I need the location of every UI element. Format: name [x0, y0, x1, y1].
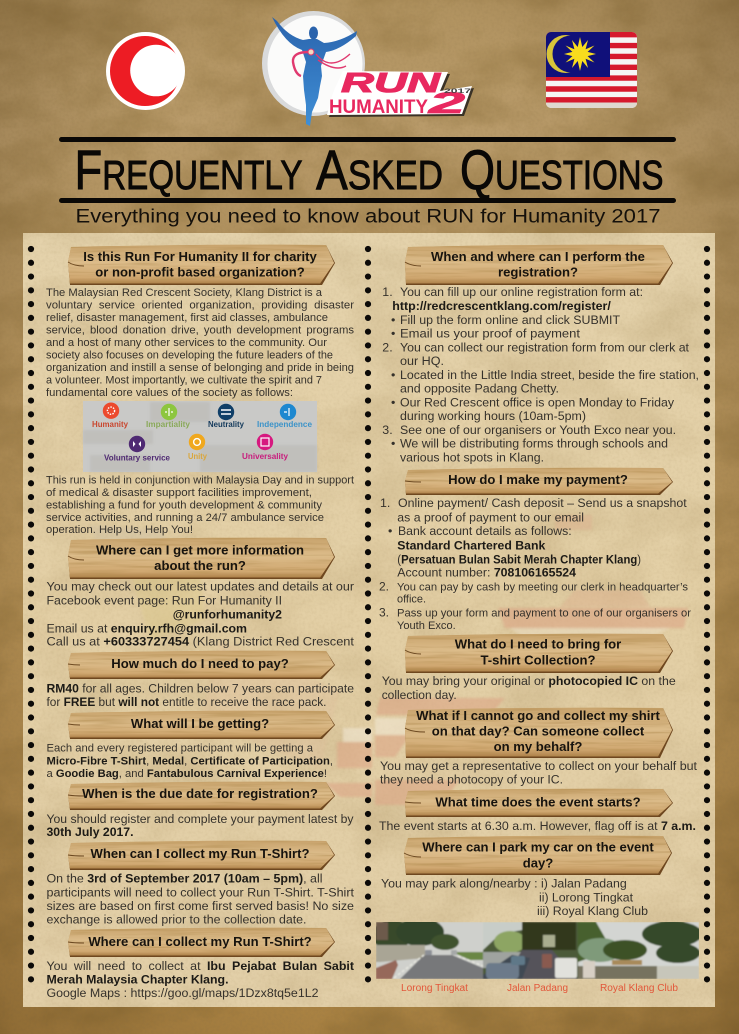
text block: registration steps: •: [391, 396, 395, 410]
panel: right column: [372, 245, 702, 994]
text block: representative: they need a photocopy of your IC.: [380, 773, 563, 787]
text block: payment steps: Bank account details as follows:: [398, 524, 572, 538]
text block: registration steps: Email us your proof of payment: [400, 327, 581, 341]
banner: how much to pay: How much do I need to pay?: [111, 656, 289, 671]
text block: registration steps: You can collect our registration form from our clerk at: [400, 341, 690, 355]
text block: purpose of the run: This run is held in conjunction with Malaysia Day and in support: [46, 474, 354, 486]
text block: race pack: Micro-Fibre T-Shirt, Medal, Certificate of Participation,: [46, 755, 333, 767]
text block: contact details: @runforhumanity2: [173, 607, 282, 621]
content panel: [23, 233, 715, 1007]
text block: contact details: [46, 580, 355, 649]
title: ASKED: [316, 138, 443, 201]
text block: registration steps: Our Red Crescent office is open Monday to Friday: [400, 396, 675, 410]
text block: about the society: and a host of many other services to the community. Our: [46, 337, 327, 349]
text block: about the society: a volunteer. Most importantly, we cultivate the spirit and 7: [46, 374, 322, 386]
banner: collecting on behalf: on my behalf?: [494, 739, 582, 754]
text block: payment steps: 2.: [379, 580, 389, 594]
text block: payment steps: Account number: 708106165524: [397, 566, 576, 580]
text block: contact details: Facebook event page: Run For Humanity II: [46, 593, 282, 607]
text block: registration steps: See one of our organisers or Youth Exco near you.: [400, 423, 676, 437]
text block: parking places: iii) Royal Klang Club: [537, 904, 648, 918]
banner: event time: What time does the event starts?: [435, 795, 641, 810]
banner: how much to pay: [68, 651, 335, 679]
banner: due date: [68, 782, 335, 810]
banner: when to collect T-shirt: When can I collect my Run T-Shirt?: [91, 846, 309, 861]
banner: collecting on behalf: What if I cannot go and collect my shirt: [416, 708, 660, 723]
text block: registration steps: [382, 285, 699, 465]
text block: purpose of the run: operation. Help Us, Help You!: [46, 524, 193, 536]
text block: payment steps: as a proof of payment to our email: [397, 511, 584, 525]
banner: due date: When is the due date for registration?: [82, 786, 318, 801]
text block: collection date: On the 3rd of September 2017 (10am – 5pm), all: [46, 872, 322, 886]
photo captions: Royal Klang Club: [600, 983, 678, 994]
text block: parking places: You may park along/nearby : i) Jalan Padang: [381, 877, 627, 891]
text block: registration steps: various hot spots in Klang.: [400, 451, 544, 465]
logo: Run for Humanity 2: 2: [427, 87, 466, 120]
text block: collection date: sizes are based on first come first served basis! No size: [46, 899, 354, 913]
text block: about the society: fundamental core values of the society as follows:: [46, 387, 293, 399]
logo: Run for Humanity 2: 2017: [444, 88, 472, 95]
text block: payment steps: Online payment/ Cash deposit – Send us a snapshot: [398, 496, 687, 510]
banner: payment: [405, 468, 673, 495]
text block: registration steps: 2.: [382, 341, 393, 355]
text block: purpose of the run: service activities, and running a 24/7 ambulance service: [46, 512, 324, 524]
text block: registration steps: We will be distributing forms through schools and: [400, 437, 668, 451]
banner: more information: [68, 538, 335, 579]
text block: collection place: You will need to collect at Ibu Pejabat Bulan Sabit: [46, 959, 354, 973]
image: seven fundamental values: Impartiality: [146, 419, 190, 429]
text block: payment steps: office.: [397, 594, 426, 606]
text block: about the society: relief, disaster management, first aid classes, ambulance: [46, 312, 328, 324]
text block: parking places: [381, 877, 648, 918]
text block: about the society: organization and instill a sense of belonging and pride in being: [46, 362, 354, 374]
photo captions: [401, 983, 678, 994]
text block: payment steps: Standard Chartered Bank: [397, 538, 545, 552]
text block: payment steps: 3.: [379, 606, 389, 620]
text block: registration steps: •: [391, 437, 395, 451]
text block: race pack: a Goodie Bag, and Fantabulous Carnival Experience !: [46, 768, 327, 780]
banner: what to bring: What do I need to bring for: [455, 636, 621, 651]
banner: more information: Where can I get more information: [96, 542, 304, 558]
text block: representative: You may get a representative to collect on your behalf but: [380, 759, 698, 773]
text block: payment steps: You can pay by cash by meeting our clerk in headquarter’s: [397, 582, 688, 594]
text block: what to bring: [382, 674, 676, 702]
text block: registration steps: 1.: [382, 285, 393, 299]
banner: charity question: or non-profit based organization?: [95, 264, 305, 280]
dotted column edges: [31, 249, 707, 992]
panel: left column: [46, 245, 355, 1000]
text block: due date: You should register and complete your payment latest by: [46, 812, 354, 826]
text block: contact details: Call us at +60333727454 (Klang District Red Crescent: [46, 635, 355, 649]
banner: charity question: Is this Run For Humanity II for charity: [83, 249, 317, 264]
banner: parking: Where can I park my car on the event: [422, 840, 654, 855]
logo: Run for Humanity 2: RUN: [341, 67, 441, 98]
banner: where to collect T-shirt: [68, 928, 335, 957]
image: seven fundamental values: Universality: [242, 451, 288, 461]
text block: registration steps: during working hours (10am-5pm): [400, 409, 586, 423]
text block: due date: 30th July 2017.: [46, 825, 134, 839]
title: QUESTIONS: [460, 138, 664, 201]
text block: contact details: You may check out our latest updates and details at our: [46, 580, 354, 594]
banner: registration: [405, 245, 673, 285]
text block: payment steps: •: [388, 524, 392, 538]
text block: payment steps: Youth Exco.: [397, 620, 456, 632]
text block: payment steps: 1.: [380, 496, 390, 510]
text block: purpose of the run: [46, 474, 354, 536]
banner: event time: [405, 789, 673, 817]
banner: what to bring: T-shirt Collection?: [481, 652, 595, 667]
title: [59, 137, 676, 203]
text block: what to bring: collection day.: [382, 688, 457, 702]
banner: parking: day?: [523, 855, 553, 870]
icon: Malaysian flag: [546, 32, 637, 108]
text block: collection place: [46, 959, 354, 1000]
text block: representative: [380, 759, 698, 787]
banner: what will I be getting: What will I be getting?: [131, 716, 269, 731]
text block: payment steps: (Persatuan Bulan Sabit Merah Chapter Klang): [397, 554, 641, 566]
banner: collecting on behalf: on that day? Can someone collect: [432, 724, 645, 739]
banner: when to collect T-shirt: [68, 841, 335, 870]
photo captions: Jalan Padang: [507, 983, 568, 994]
text block: about the society: service, blood donation drive, youth development programs: [46, 325, 354, 337]
text block: parking places: ii) Lorong Tingkat: [539, 891, 634, 905]
text block: registration steps: and opposite Padang Chetty.: [400, 382, 559, 396]
text block: registration steps: Located in the Little India street, beside the fire station,: [400, 368, 699, 382]
image: seven fundamental values: Unity: [188, 451, 207, 461]
text block: fees: for FREE but will not entitle to receive the race pack.: [46, 695, 326, 709]
text block: fees: [46, 681, 354, 709]
image: seven fundamental values: Independence: [257, 419, 312, 429]
text block: payment steps: [379, 496, 691, 632]
banner: charity question: [68, 245, 335, 285]
text block: collection date: exchange is allowed prior to the collection date.: [46, 912, 306, 926]
text block: collection place: Google Maps : https://goo.gl/maps/1Dzx8tq5e1L2: [46, 986, 319, 1000]
text block: registration steps: You can fill up our online registration form at:: [400, 285, 643, 299]
icon: red crescent logo: [106, 32, 185, 110]
text block: registration steps: http://redcrescentklang.com/register/: [392, 299, 611, 313]
text block: due date: [46, 812, 354, 839]
banner: what will I be getting: [68, 711, 335, 739]
text block: collection date: participants will need to collect your Run T-Shirt. T-Shirt: [46, 886, 355, 900]
text block: about the society: [46, 287, 354, 399]
text block: registration steps: •: [391, 313, 395, 327]
text block: race pack: [46, 743, 333, 780]
text block: collection place: Merah Malaysia Chapter Klang.: [46, 972, 228, 986]
text block: race pack: Each and every registered participant will be getting a: [46, 743, 314, 755]
text block: purpose of the run: of medical & disaster support facilities improvement,: [46, 487, 312, 499]
banner: payment: How do I make my payment?: [448, 472, 628, 487]
photo captions: Lorong Tingkat: [401, 983, 468, 994]
text block: collection date: [46, 872, 355, 926]
image: seven fundamental values: Neutrality: [208, 419, 244, 429]
photos: parking locations: [372, 918, 702, 979]
logo: Run for Humanity 2: HUMANITY: [329, 96, 428, 118]
banner: parking: [404, 836, 672, 875]
logo: Run for Humanity 2: [262, 11, 474, 126]
text block: fees: RM40 for all ages. Children below 7 years can participate: [46, 681, 354, 695]
text block: registration steps: 3.: [382, 423, 393, 437]
text block: payment steps: Pass up your form and payment to one of our organisers or: [397, 608, 691, 620]
banner: what to bring: [405, 634, 673, 673]
title: FREQUENTLY: [74, 138, 302, 201]
text block: contact details: Email us at enquiry.rfh@gmail.com: [46, 621, 247, 635]
banner: more information: about the run?: [154, 558, 246, 573]
banner: registration: When and where can I perform the: [431, 249, 645, 264]
banner: collecting on behalf: [405, 708, 673, 758]
text block: registration steps: our HQ.: [400, 354, 444, 368]
text block: event time: The event starts at 6.30 a.m. However, flag off is at 7 a.m.: [379, 819, 696, 833]
image: seven fundamental values: [83, 401, 317, 472]
image: seven fundamental values: Voluntary service: [104, 452, 170, 462]
banner: registration: registration?: [498, 264, 578, 280]
text block: registration steps: •: [391, 368, 395, 382]
text block: about the society: voluntary service oriented organization, providing disaster: [46, 300, 354, 312]
subtitle: Everything you need to know about RUN for Humanity 2017: [76, 206, 660, 228]
text block: registration steps: Fill up the form online and click SUBMIT: [400, 313, 620, 327]
text block: about the society: The Malaysian Red Crescent Society, Klang District is a: [46, 287, 323, 299]
text block: purpose of the run: establishing a fund for youth development & community: [46, 499, 323, 511]
image: seven fundamental values: Humanity: [92, 419, 128, 429]
banner: where to collect T-shirt: Where can I collect my Run T-Shirt?: [88, 934, 312, 949]
text block: about the society: society also focuses on developing the future leaders of the: [46, 349, 333, 361]
text block: registration steps: •: [391, 327, 395, 341]
text block: what to bring: You may bring your original or photocopied IC on the: [382, 674, 676, 688]
